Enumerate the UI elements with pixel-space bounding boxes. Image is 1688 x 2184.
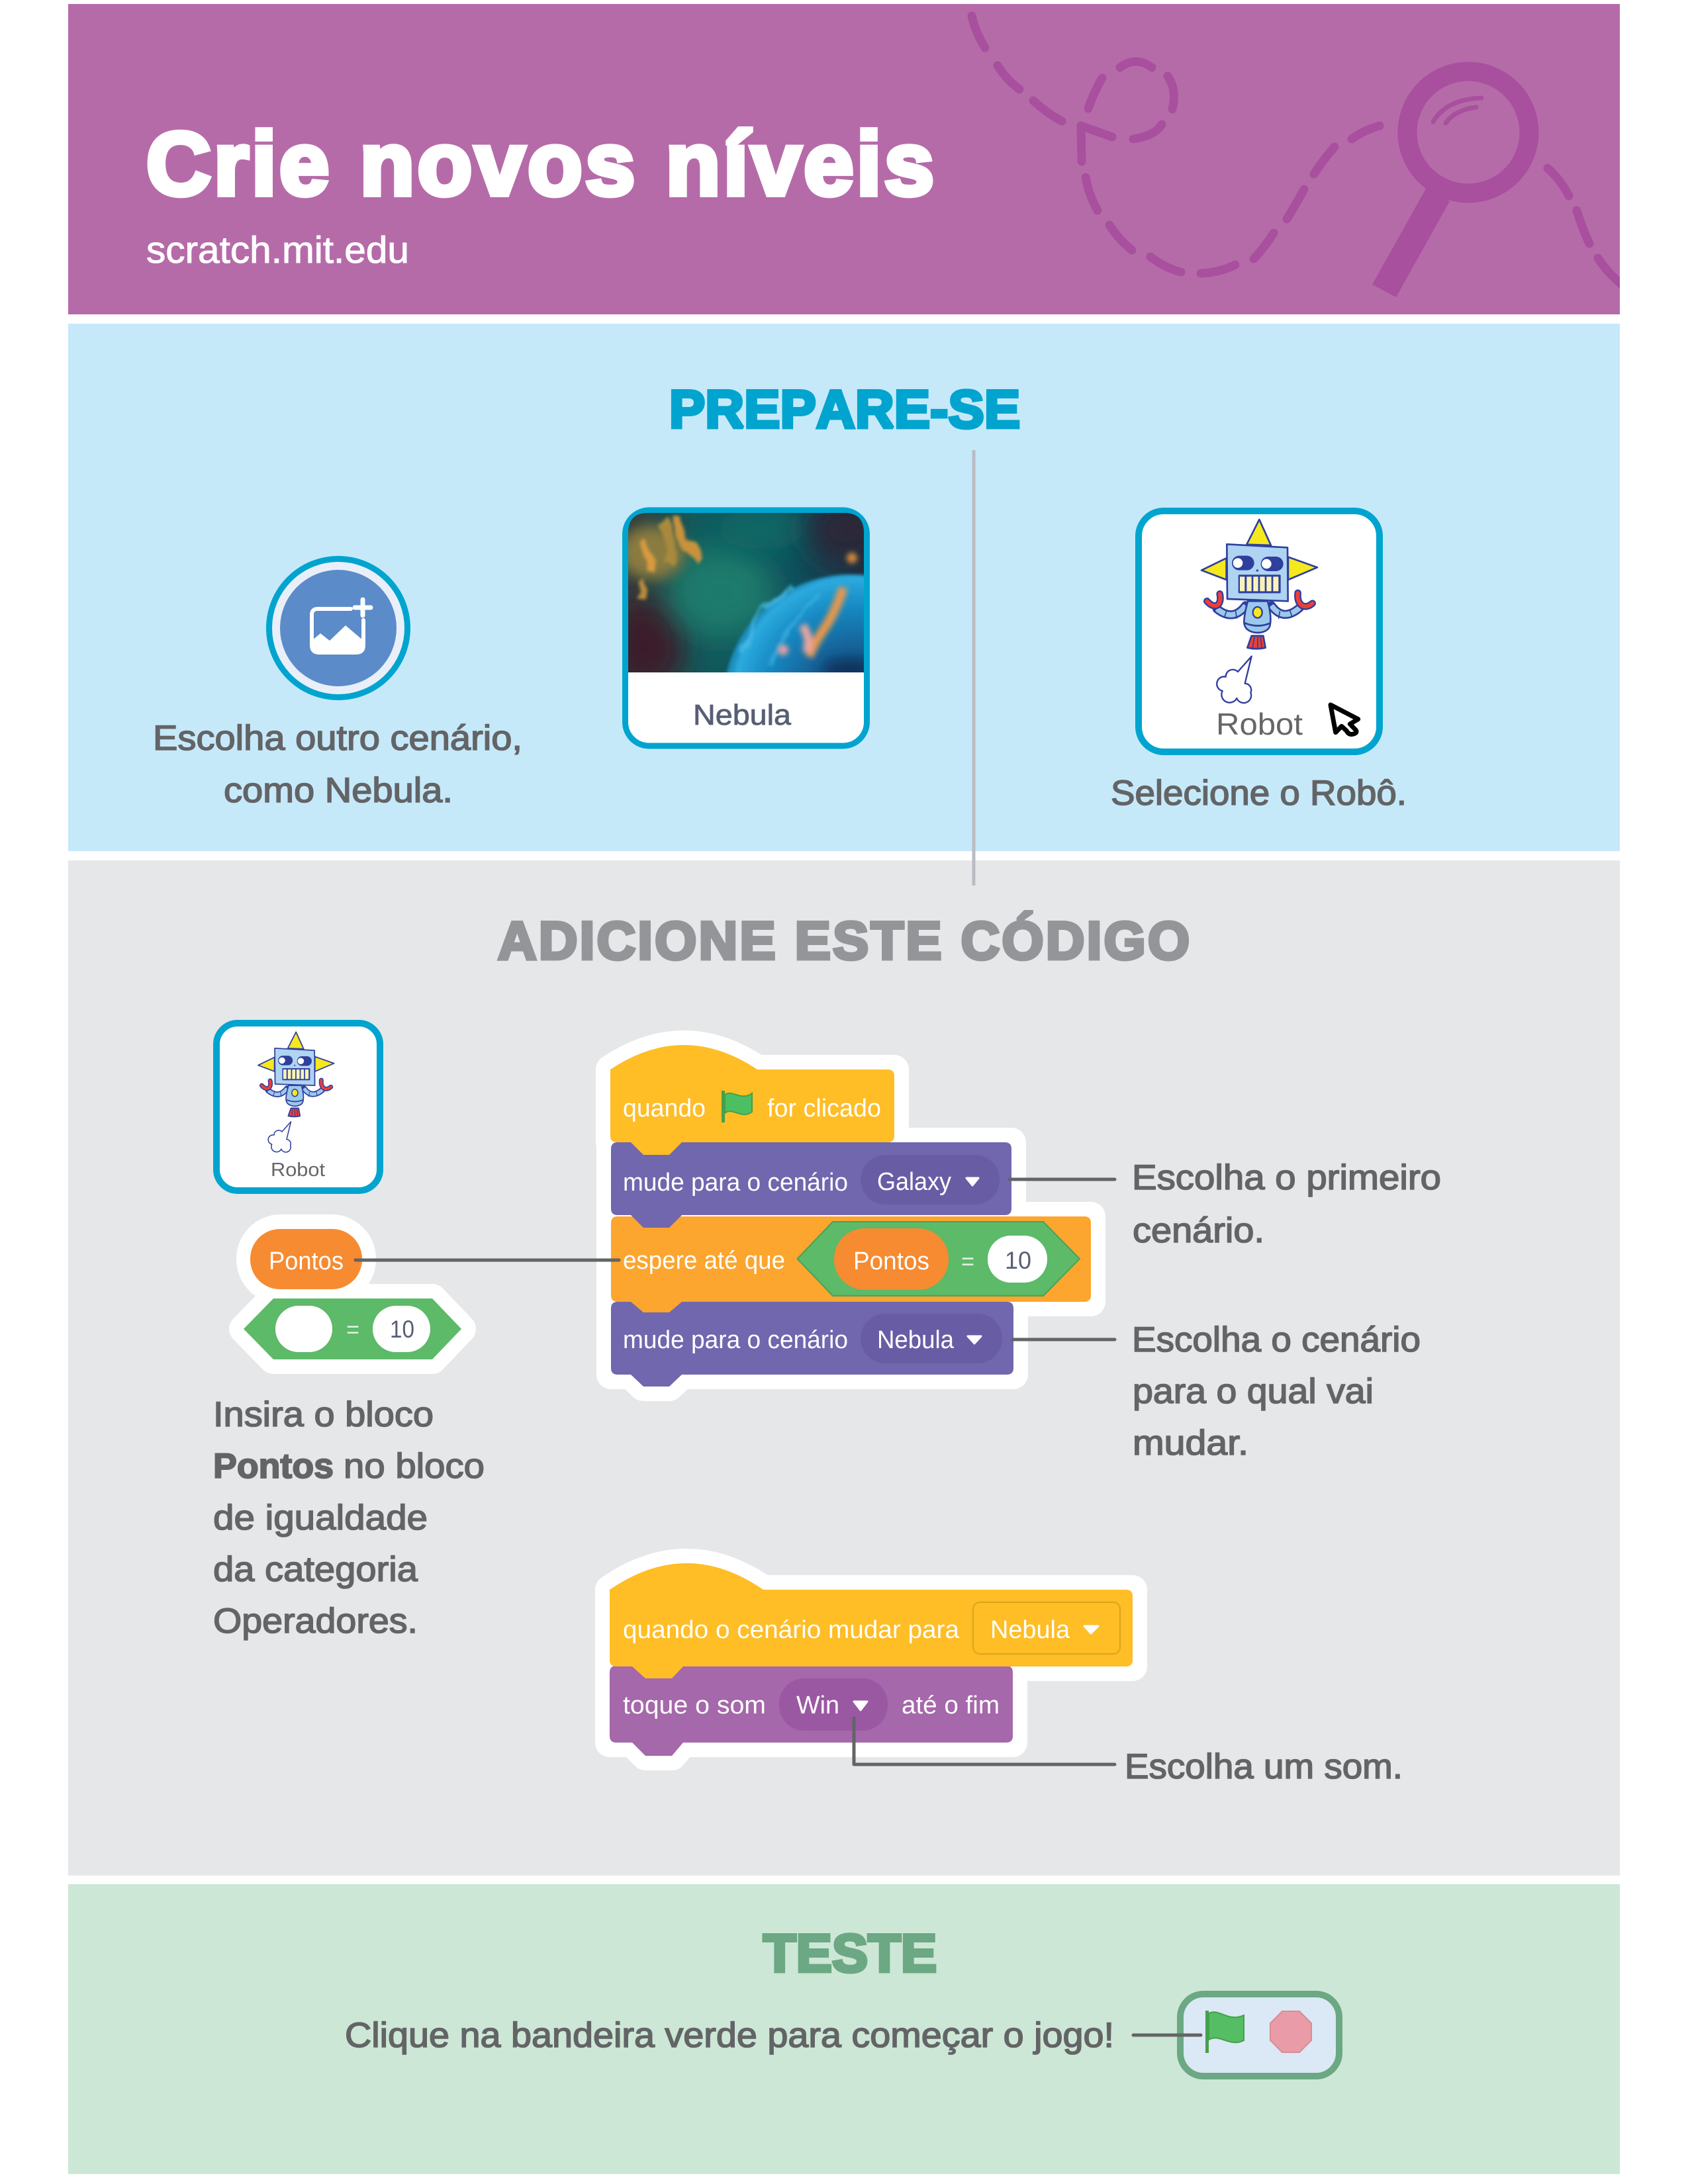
leader line: win sound xyxy=(854,1718,1115,1764)
text: click green flag: Clique na bandeira verde para começar o jogo! xyxy=(345,2016,1114,2055)
leader line: pontos to wait block xyxy=(355,1259,619,1261)
icon: choose backdrop button xyxy=(269,559,408,698)
leader line: galaxy xyxy=(1009,1178,1115,1181)
panel: adicione este codigo xyxy=(68,860,1620,1876)
code stack: flag clicked xyxy=(610,1045,1091,1387)
text: choose a sound: Escolha um som. xyxy=(1125,1747,1403,1786)
icon: stop sign xyxy=(1270,2011,1311,2052)
block: wait until: 10 xyxy=(1005,1247,1031,1274)
text: insert block instructions: da categoria xyxy=(213,1550,418,1589)
block: change backdrop nebula xyxy=(611,1302,1013,1387)
label: nebula: Nebula xyxy=(693,699,792,731)
block: wait until: espere até que xyxy=(623,1247,785,1275)
block: when flag clicked xyxy=(610,1045,894,1155)
icon: green flag xyxy=(1205,2011,1244,2053)
text: choose backdrop to switch to: para o qual vai xyxy=(1133,1372,1374,1411)
code stack: backdrop switch xyxy=(610,1563,1133,1756)
block: change backdrop galaxy xyxy=(611,1142,1011,1228)
text: choose backdrop to switch to xyxy=(1132,1320,1421,1463)
text: select robot: Selecione o Robô. xyxy=(1111,774,1407,813)
subtitle: url: scratch.mit.edu xyxy=(146,229,409,271)
text: insert block instructions: de igualdade xyxy=(213,1498,428,1537)
block: wait until xyxy=(611,1216,1091,1312)
block: change backdrop nebula: Nebula xyxy=(877,1326,955,1354)
block: when flag clicked: for clicado xyxy=(767,1095,881,1122)
text: choose backdrop to switch to: Escolha o cenário xyxy=(1132,1320,1421,1359)
card: robot sprite small xyxy=(216,1023,380,1191)
image: nebula xyxy=(628,513,864,672)
card: robot sprite xyxy=(1139,511,1380,752)
block: change backdrop galaxy: mude para o cenário xyxy=(623,1169,848,1197)
text: choose backdrop to switch to: mudar. xyxy=(1133,1424,1248,1463)
blocks: pontos and equals: Pontos xyxy=(269,1248,344,1275)
label: robot: Robot xyxy=(1216,707,1303,741)
card: nebula backdrop xyxy=(622,507,870,749)
block: when flag clicked: quando xyxy=(623,1095,706,1122)
block: play sound: até o fim xyxy=(902,1692,1000,1719)
leader line: nebula xyxy=(1013,1338,1115,1341)
text: choose first backdrop xyxy=(1132,1158,1441,1250)
heading: adicione este codigo: ADICIONE ESTE CÓDIGO xyxy=(498,911,1190,971)
text: choose backdrop: como Nebula. xyxy=(224,771,453,810)
text: choose backdrop xyxy=(153,719,522,810)
text: insert block instructions: Insira o bloco xyxy=(213,1395,434,1434)
block: wait until: = xyxy=(961,1248,974,1275)
blocks: pontos and equals xyxy=(244,1229,461,1359)
block: wait until: Pontos xyxy=(853,1248,929,1275)
icon: robot small xyxy=(258,1032,334,1152)
block: when backdrop switches xyxy=(610,1563,1133,1678)
blocks: pontos and equals: 10 xyxy=(390,1316,414,1343)
block: play sound: Win xyxy=(796,1692,839,1719)
divider line xyxy=(972,450,976,886)
icon: mouse cursor xyxy=(1331,705,1358,735)
block: play sound xyxy=(610,1666,1013,1756)
heading: teste: TESTE xyxy=(763,1924,937,1983)
text: insert block instructions xyxy=(213,1395,485,1641)
text: choose first backdrop: cenário. xyxy=(1133,1211,1264,1250)
icon: robot xyxy=(1201,520,1317,703)
text: insert block instructions: no bloco xyxy=(344,1447,485,1486)
text: choose first backdrop: Escolha o primeiro xyxy=(1132,1158,1441,1197)
blocks: pontos and equals: = xyxy=(346,1316,359,1343)
panel: header xyxy=(68,4,1622,314)
text: insert block instructions: Operadores. xyxy=(213,1602,418,1641)
block: play sound: toque o som xyxy=(623,1692,766,1719)
text: insert block instructions: Pontos xyxy=(213,1447,334,1486)
block: change backdrop galaxy: Galaxy xyxy=(877,1168,951,1196)
block: change backdrop nebula: mude para o cenário xyxy=(623,1326,848,1354)
block: when backdrop switches: quando o cenário mudar para xyxy=(623,1616,960,1644)
leader line: flag xyxy=(1133,2033,1201,2037)
block: when backdrop switches: Nebula xyxy=(990,1616,1070,1644)
title: Crie novos níveis xyxy=(146,114,934,214)
decoration: dashed trail and magnifying glass xyxy=(972,16,1622,297)
icon: green flag in block xyxy=(722,1091,752,1122)
button: flag and stop controls xyxy=(1180,1994,1339,2076)
heading: prepare-se: PREPARE-SE xyxy=(669,380,1020,439)
label: robot small: Robot xyxy=(271,1160,325,1181)
panel: prepare-se xyxy=(68,324,1620,851)
panel: teste xyxy=(68,1884,1620,2174)
text: choose backdrop: Escolha outro cenário, xyxy=(153,719,522,758)
